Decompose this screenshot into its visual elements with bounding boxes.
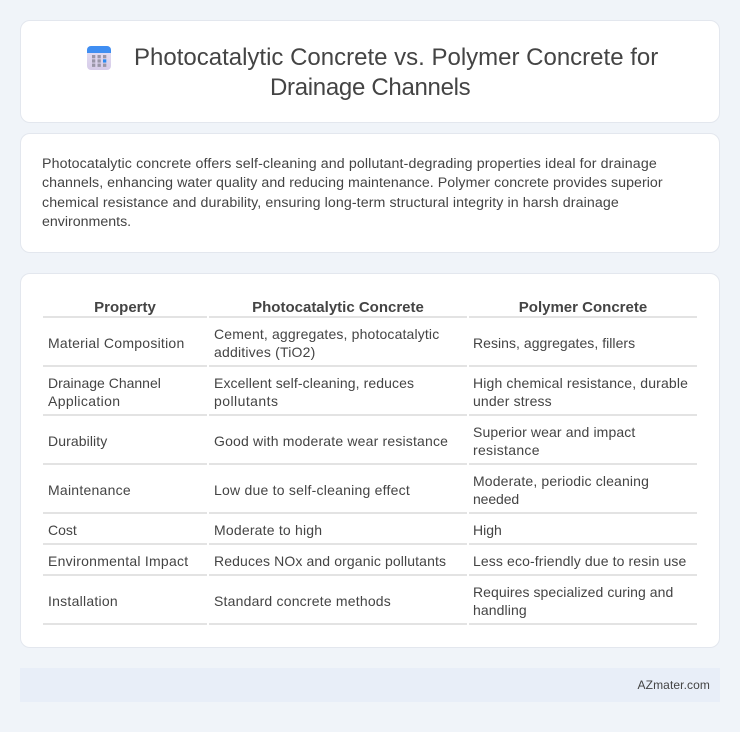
row: material composition: additives (TiO2) [214,344,316,360]
row: environmental impact: Environmental Impact [48,553,188,569]
panel: intro [20,133,720,253]
table header row [94,299,647,316]
row: environmental impact: Reduces NOx and organic pollutants [214,553,446,569]
row: cost [48,522,502,538]
row: durability: Superior wear and impact [473,424,635,440]
row: material composition [48,326,635,360]
title: Drainage Channels [270,74,470,101]
row: material composition: Cement, aggregates, photocatalytic [214,326,439,342]
row: maintenance: Maintenance [48,482,131,498]
row: environmental impact [48,553,686,569]
row: drainage channel application: Drainage Channel [48,375,161,391]
row: drainage channel application: High chemical resistance, durable [473,375,688,391]
table header row: Property [94,299,156,316]
row: durability: resistance [473,442,540,458]
row: installation: Requires specialized curing and [473,584,673,600]
footer credit: AZmater.com [638,678,710,692]
table header row: Photocatalytic Concrete [252,299,424,316]
intro paragraph: environments. [42,214,131,230]
title [134,44,658,101]
row: maintenance: Moderate, periodic cleaning [473,473,649,489]
footer bar [20,668,720,702]
row: cost: Moderate to high [214,522,322,538]
row: drainage channel application [48,375,688,409]
table header row: Polymer Concrete [519,299,647,316]
icon: calendar [87,46,111,70]
row: cost: Cost [48,522,77,538]
row: drainage channel application: Application [48,393,120,409]
row: maintenance: needed [473,491,519,507]
row: maintenance: Low due to self-cleaning effect [214,482,410,498]
row: material composition: Resins, aggregates, fillers [473,335,635,351]
row: drainage channel application: under stress [473,393,552,409]
intro paragraph: channels, enhancing water quality and reducing maintenance. Polymer concrete provides superior [42,175,663,191]
row: durability [48,424,636,458]
row: durability: Durability [48,433,107,449]
row: maintenance [48,473,649,507]
intro paragraph: Photocatalytic concrete offers self-cleaning and pollutant-degrading properties ideal for drainage [42,156,657,172]
panel: title header [20,20,720,123]
row: installation [48,584,673,618]
title: Photocatalytic Concrete vs. Polymer Concrete for [134,44,658,71]
row: material composition: Material Composition [48,335,184,351]
row: installation: handling [473,602,527,618]
row: environmental impact: Less eco-friendly due to resin use [473,553,686,569]
intro paragraph [42,156,663,230]
row: cost: High [473,522,502,538]
row: durability: Good with moderate wear resistance [214,433,448,449]
row: drainage channel application: Excellent self-cleaning, reduces [214,375,414,391]
panel: comparison table [20,273,720,648]
intro paragraph: chemical resistance and durability, ensuring long-term structural integrity in harsh drainage [42,195,619,211]
table row lines [43,316,697,625]
row: installation: Installation [48,593,118,609]
row: installation: Standard concrete methods [214,593,391,609]
row: drainage channel application: pollutants [214,393,278,409]
